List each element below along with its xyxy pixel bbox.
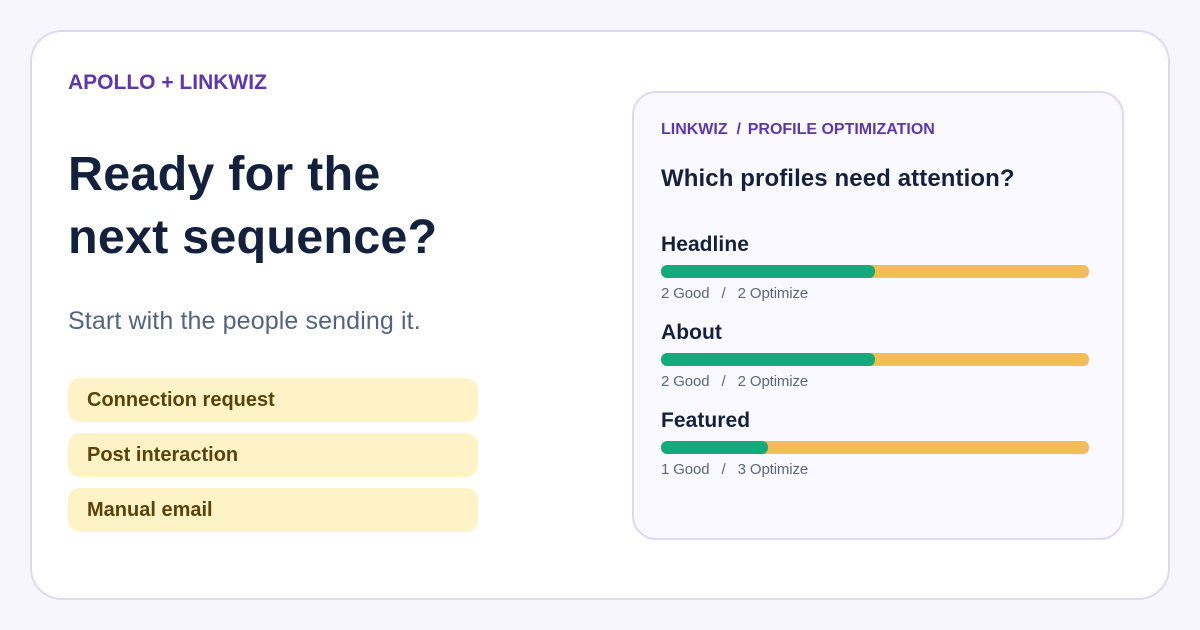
chip: post interaction: Post interaction [87, 444, 238, 466]
title: Ready for the [68, 147, 381, 201]
counts: about: 2 Good / 2 Optimize [661, 373, 808, 390]
stacked bar: featured 1 good, 3 optimize [661, 441, 1089, 454]
stacked bar: headline 2 good, 2 optimize [661, 265, 1089, 278]
label: featured: Featured [661, 409, 750, 432]
counts: headline: 2 Good / 2 Optimize [661, 285, 808, 302]
row: headline [661, 233, 1089, 302]
panel eyebrow: LINKWIZ / PROFILE OPTIMIZATION [661, 121, 935, 138]
subtitle: Start with the people sending it. [68, 307, 421, 335]
title: next sequence? [68, 210, 437, 264]
chip: connection request: Connection request [87, 389, 275, 411]
eyebrow: Apollo + Linkwiz: APOLLO + LINKWIZ [68, 71, 267, 94]
label: about: About [661, 321, 722, 344]
label: headline: Headline [661, 233, 749, 256]
panel: profile optimization [632, 91, 1124, 540]
row: featured [661, 409, 1089, 478]
stacked bar: about 2 good, 2 optimize [661, 353, 1089, 366]
chip: manual email: Manual email [87, 499, 213, 521]
row: about [661, 321, 1089, 390]
counts: featured: 1 Good / 3 Optimize [661, 461, 808, 478]
chip: manual email [68, 488, 478, 532]
panel heading: Which profiles need attention? [661, 165, 1015, 192]
chip: post interaction [68, 433, 478, 477]
chip: connection request [68, 378, 478, 422]
title [68, 147, 437, 264]
